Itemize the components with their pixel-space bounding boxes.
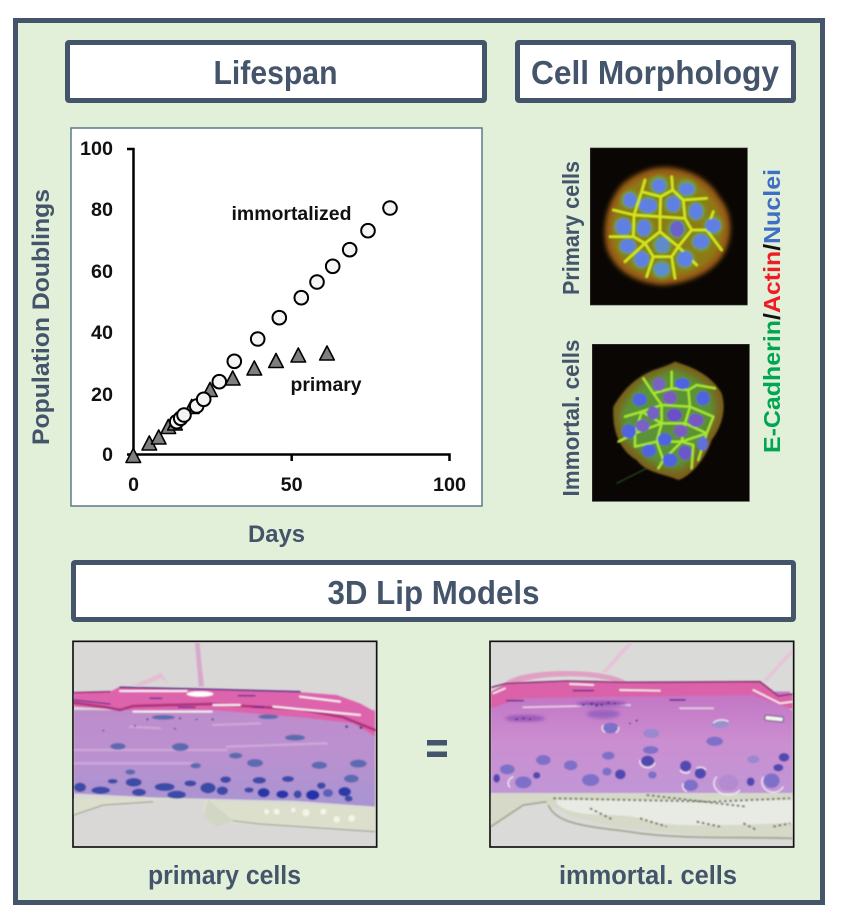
label: Primary cells: Primary cells [558,161,584,295]
y axis tick labels: 100 [80,138,113,160]
y axis tick labels [80,138,113,466]
heading: 3D Lip Models: 3D Lip Models [328,574,540,611]
heading: 3D Lip Models [74,562,794,620]
y axis tick labels: 0 [102,444,113,466]
x axis tick labels: 0 [128,474,139,496]
image: immortalized cell colony [592,344,749,501]
heading: Lifespan [68,42,484,100]
caption: primary cells: primary cells [148,862,301,890]
x axis tick labels [128,474,466,496]
image: immortal cells 3D lip model histology [490,641,794,847]
series: primary triangles [126,346,334,462]
y axis tick labels: 80 [91,199,113,221]
series label: primary: primary [290,375,362,396]
cell junctions [610,177,722,278]
y axis tick labels: 20 [91,384,113,406]
y axis tick labels: 60 [91,261,113,283]
x axis tick labels: 50 [281,474,303,496]
cell junctions [618,372,715,468]
y axis tick labels: 40 [91,322,113,344]
image: primary cells 3D lip model histology [73,641,377,847]
y axis and x axis [127,149,450,461]
axis title: Days: Days [248,521,305,548]
heading: Cell Morphology [518,42,794,100]
series: immortalized circles [170,201,397,429]
axis title: Population Doublings: Population Doublings [28,189,55,445]
x axis tick labels: 100 [433,474,466,496]
equals sign [427,740,447,757]
heading: Lifespan: Lifespan [214,54,338,91]
label: stain legend: E-Cadherin/Actin/Nuclei [759,169,785,453]
image: primary cell colony [590,148,747,305]
heading: Cell Morphology: Cell Morphology [531,54,780,91]
label: Immortal. cells: Immortal. cells [558,340,584,496]
series label: immortalized: immortalized [232,204,352,225]
caption: immortal. cells: immortal. cells [559,862,737,890]
chart: lifespan scatter plot [71,128,482,506]
